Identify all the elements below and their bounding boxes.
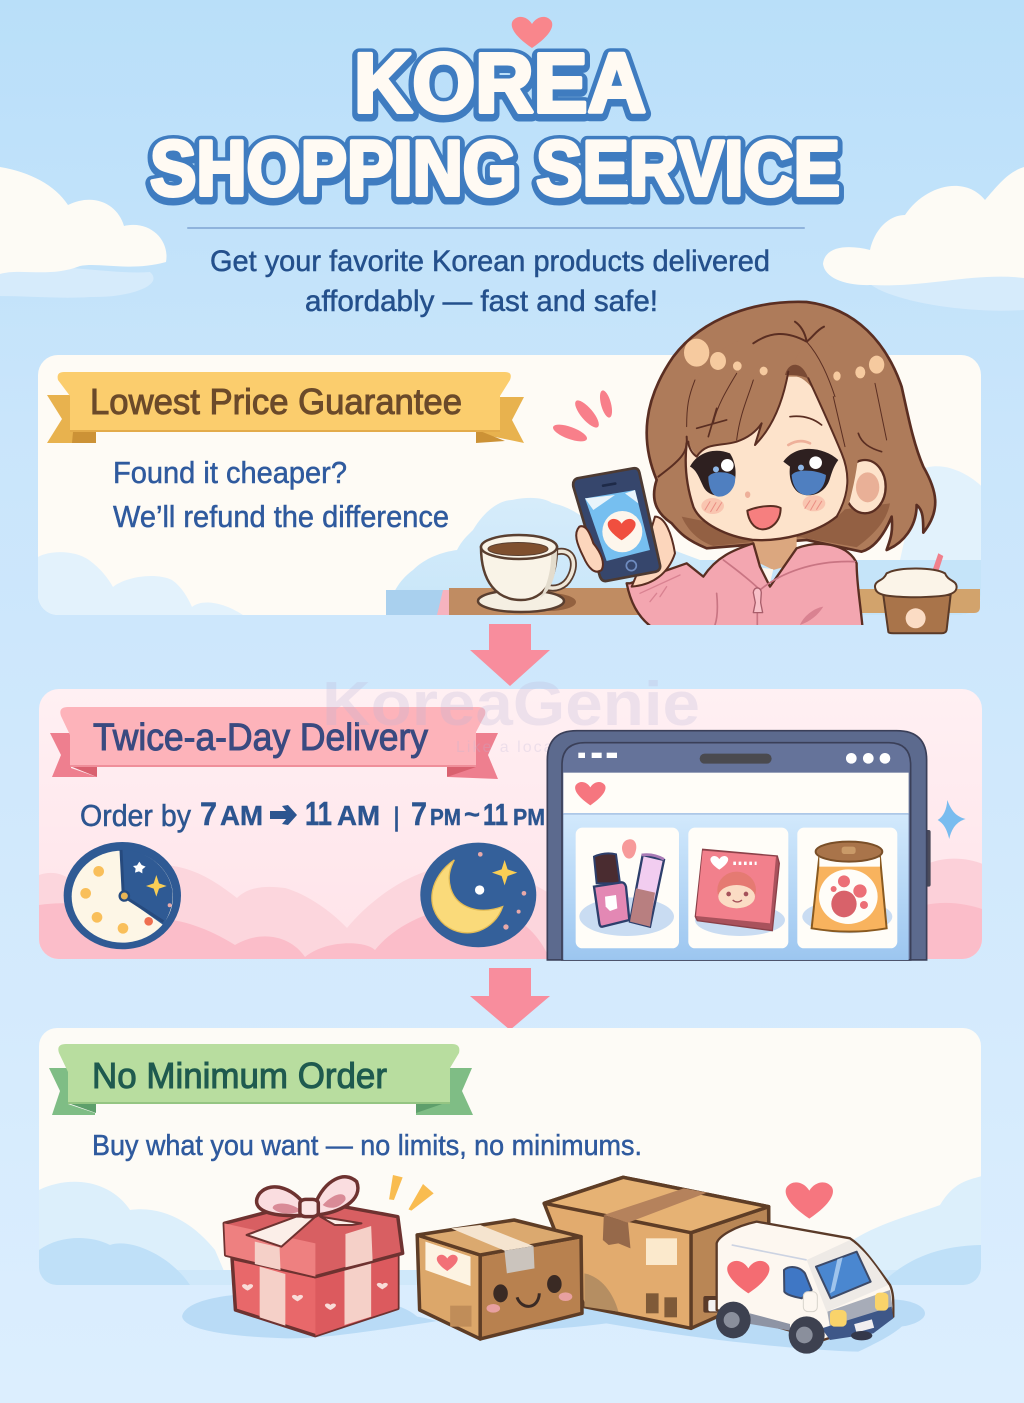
title line: KOREA: KOREA: [354, 36, 646, 130]
arrow: down 2: [470, 968, 550, 1030]
panel text: price guarantee: We’ll refund the difference: [113, 499, 449, 534]
panel: lowest price guarantee: [38, 355, 990, 615]
delivery schedule text: 11: [483, 797, 508, 832]
arrow: down 1: [470, 624, 550, 686]
face: [685, 377, 847, 540]
mouth: [747, 506, 781, 529]
icon: clock: [64, 842, 181, 949]
illustration: smartphone store: [547, 731, 966, 960]
icon: takeaway cup: [875, 553, 957, 633]
banner: no minimum order: [49, 1044, 473, 1115]
subtitle: Get your favorite Korean products delivered: [210, 245, 770, 278]
product card: cosmetics: [576, 828, 679, 948]
large cardboard box: [544, 1177, 770, 1328]
clouds: top left: [0, 167, 167, 298]
phone status bar: [578, 753, 890, 764]
banner: lowest price guarantee: [47, 372, 524, 443]
title: [150, 17, 840, 214]
product card: face mask pack: [688, 828, 788, 948]
ground shadow: [182, 1293, 909, 1352]
gift box: [224, 1177, 403, 1336]
heart over van: [786, 1182, 833, 1219]
subtitle: affordably — fast and safe!: [305, 285, 658, 318]
banner: twice-a-day delivery: [50, 707, 498, 779]
delivery schedule text: 7: [411, 796, 427, 832]
banner title: Twice-a-Day Delivery: [93, 717, 428, 759]
delivery schedule text: PM: [513, 804, 545, 830]
fingers: [576, 526, 603, 572]
delivery schedule text: PM: [430, 804, 461, 830]
delivery schedule text: Order by: [80, 798, 191, 833]
illustration: parcels and van: [182, 1175, 925, 1354]
hair highlights: [684, 339, 884, 381]
panel text: price guarantee: Found it cheaper?: [113, 455, 347, 490]
hoodie: [627, 543, 863, 628]
panel: twice-a-day delivery: [39, 689, 985, 960]
delivery schedule text: 11: [305, 795, 332, 832]
icon: blue sparkle: [938, 800, 966, 839]
arm sleeve and back hand: [632, 517, 675, 587]
icon: moon: [420, 843, 536, 947]
phone body: [547, 731, 927, 960]
panel text: price guarantee: [113, 455, 449, 534]
blush: [701, 495, 825, 514]
eye: left: [690, 451, 736, 497]
product card: snack bag: [797, 828, 897, 948]
phone: [573, 468, 660, 581]
icon: title heart: [512, 17, 552, 48]
panel text: no minimum: Buy what you want — no limits, no minimums.: [92, 1130, 642, 1162]
table: [449, 588, 980, 615]
van: [703, 1182, 925, 1354]
phone side button: [923, 830, 931, 887]
delivery schedule text: 7: [200, 796, 217, 832]
banner title: Lowest Price Guarantee: [90, 381, 462, 422]
hair front: [658, 322, 887, 517]
title line: KOREA: KOREA: [354, 38, 646, 132]
title line: SHOPPING SERVICE: SHOPPING SERVICE: [150, 124, 840, 212]
watermark: KoreaGenie: [322, 670, 700, 739]
sparks: [389, 1175, 434, 1211]
delivery schedule text: ~: [464, 799, 480, 829]
icon: coffee cup: [478, 535, 573, 612]
mini hearts on gift: [242, 1283, 388, 1310]
panel: no minimum order: [39, 1028, 985, 1285]
app header: [563, 773, 909, 814]
eye: right: [783, 449, 838, 495]
small cardboard box with face: [417, 1220, 582, 1339]
ear: [844, 460, 886, 513]
icon: excitement strokes: [551, 389, 614, 445]
delivery schedule text: |: [393, 802, 400, 832]
watermark: Like a local: [456, 739, 560, 756]
delivery schedule text: AM: [220, 800, 263, 831]
banner title: No Minimum Order: [92, 1055, 387, 1096]
title line: SHOPPING SERVICE: SHOPPING SERVICE: [150, 126, 840, 214]
neck: [753, 533, 797, 570]
subtitle: [210, 245, 770, 318]
delivery schedule text: AM: [337, 800, 380, 831]
delivery schedule text: [80, 795, 545, 833]
hair back: [647, 302, 935, 552]
clouds: top right: [823, 167, 1024, 311]
illustration: girl with phone: [573, 302, 935, 628]
eyebrows and nose: [745, 416, 822, 498]
